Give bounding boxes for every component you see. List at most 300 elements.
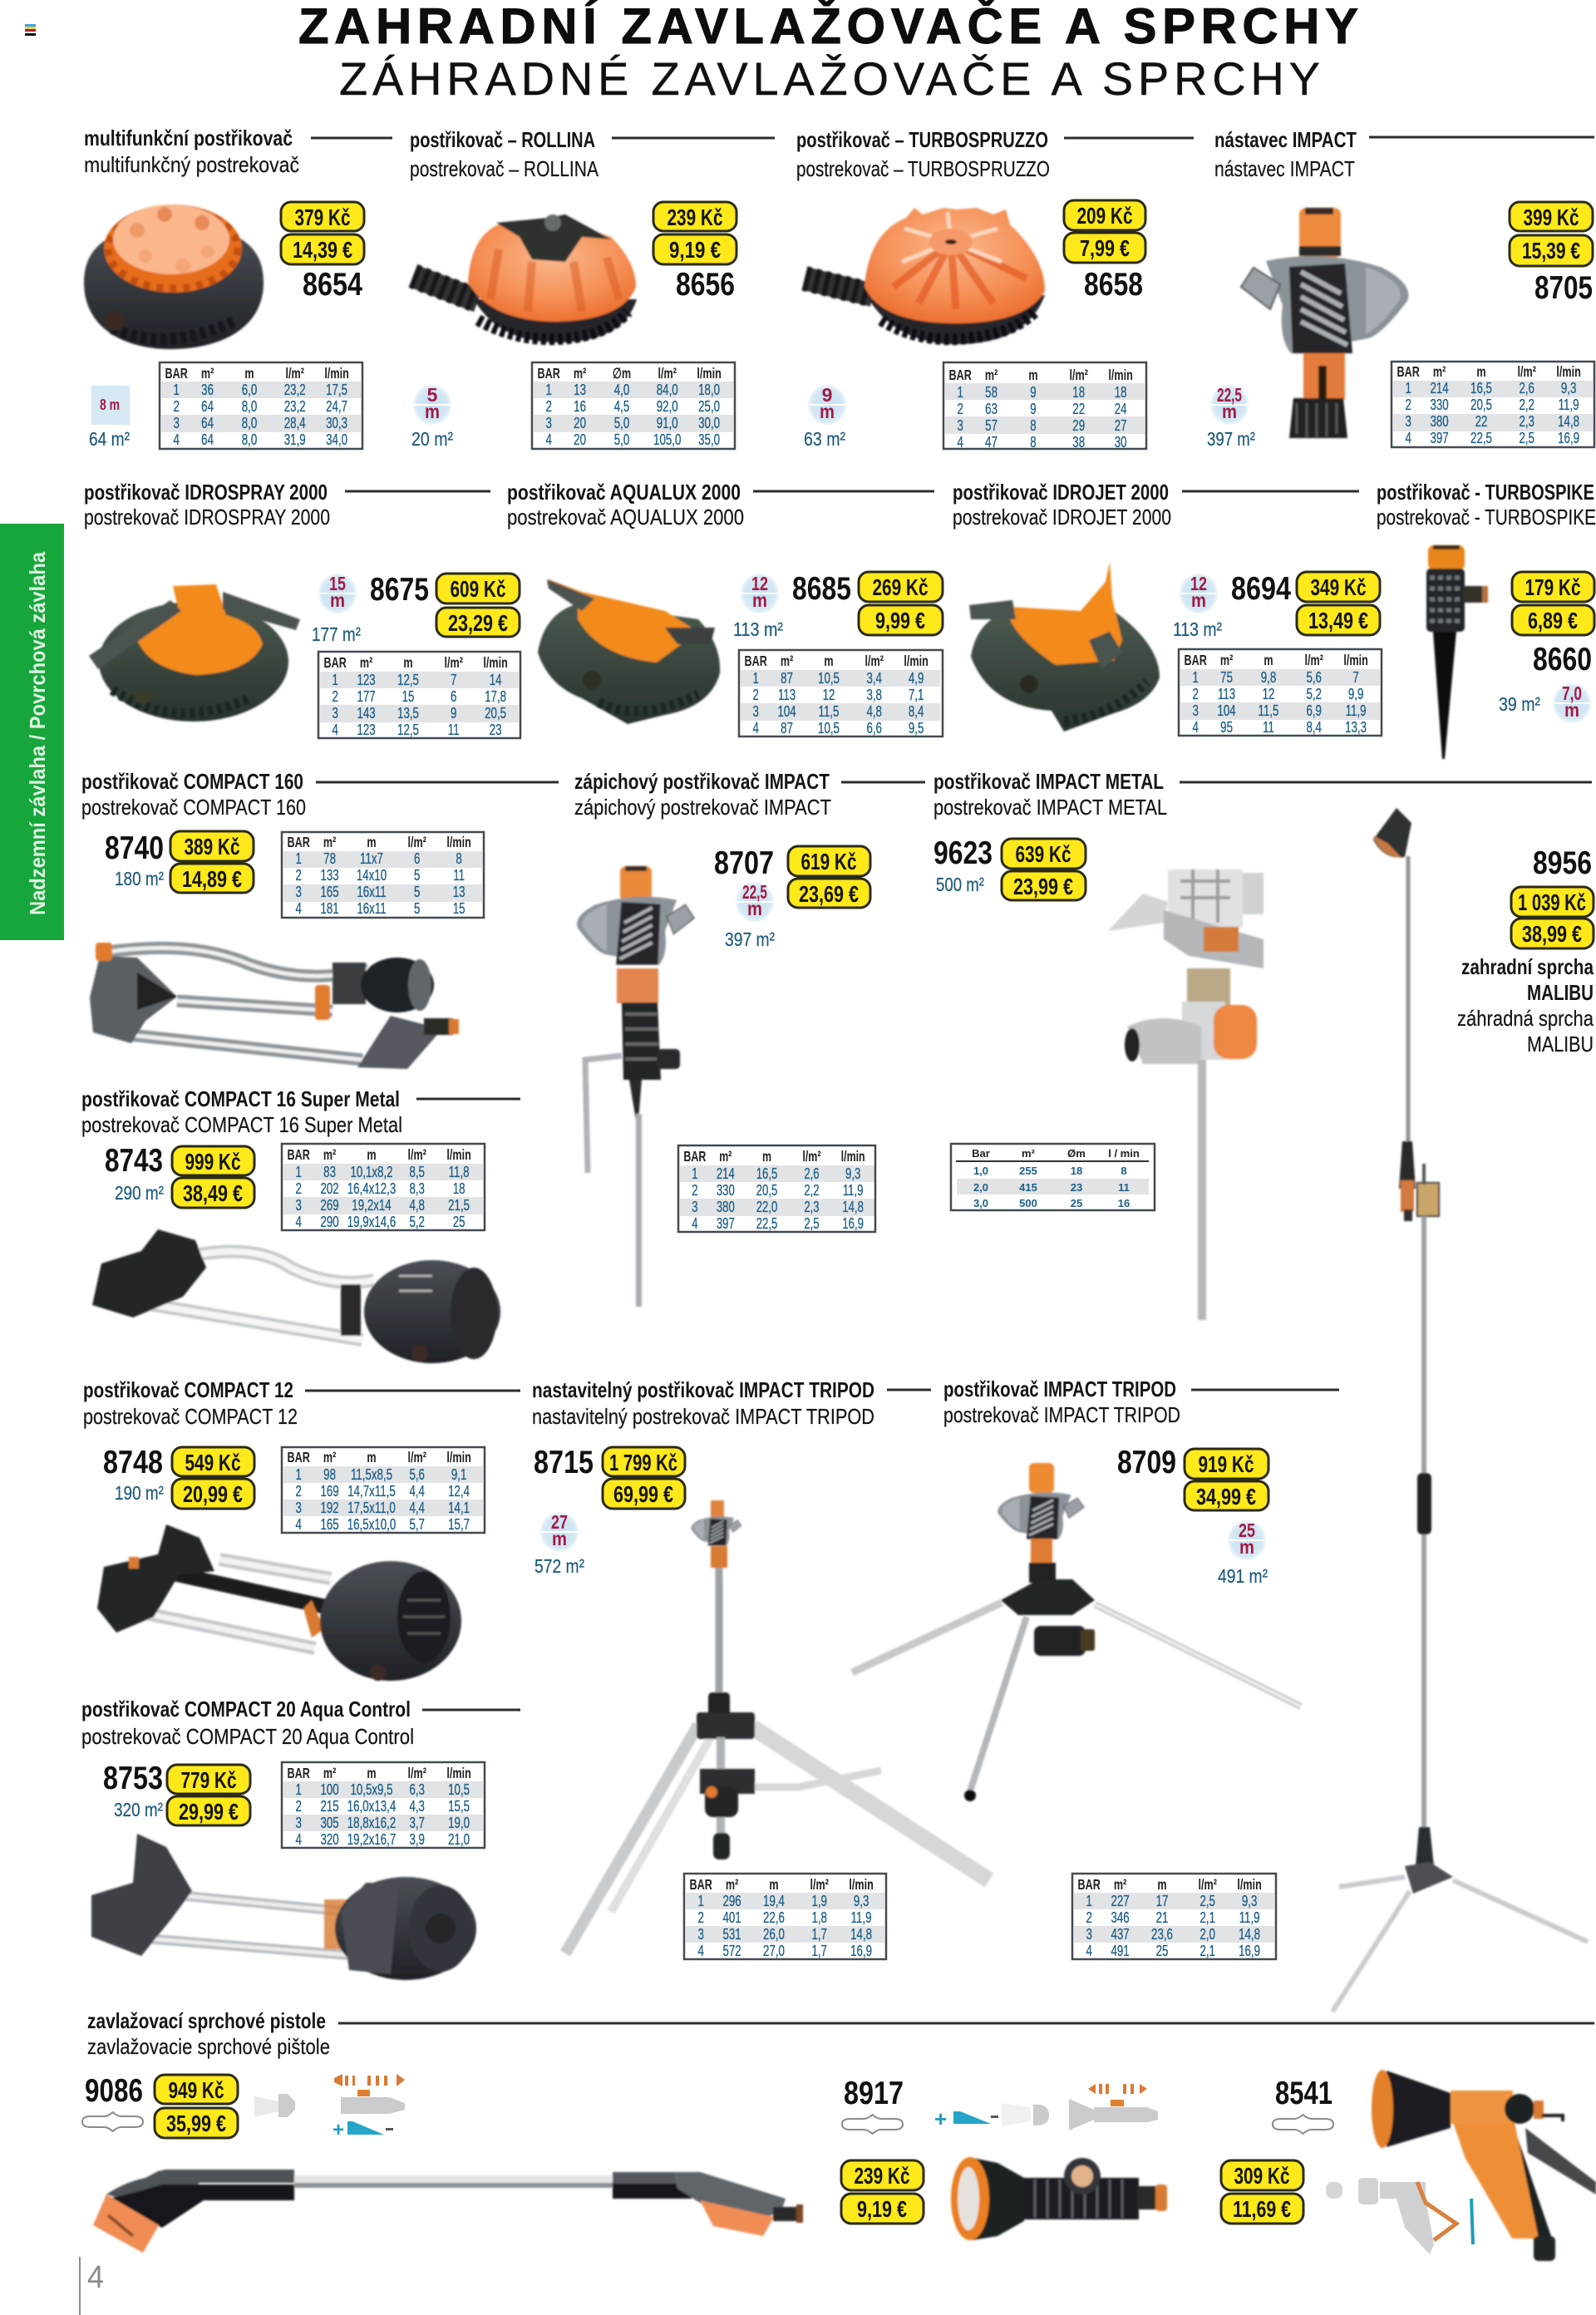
data table: 17 [1156,1893,1168,1910]
data table: 214 [717,1165,735,1183]
data table: ∅m [613,366,631,382]
data table: l/m² [802,1149,820,1165]
data table: 4 [332,722,338,739]
product image: shower nozzle [951,2157,1167,2240]
data table: 8,0 [242,415,257,432]
price badges [155,2075,238,2138]
icon: spray and regulator: + [332,2119,344,2141]
product image: impact head [1241,208,1408,438]
data table: 18,0 [698,382,720,399]
data table: 64 [201,398,214,416]
title: ZAHRADNÍ ZAVLAŽOVAČE A SPRCHY [298,0,1358,54]
data table: m² [323,835,336,851]
data table: 4 [173,431,180,449]
coverage: 9 m, 63 m² [804,384,846,450]
data table: 5,2 [409,1214,425,1231]
price badges [167,1765,250,1825]
data table: 95 [1220,719,1233,736]
price badges [1185,1449,1268,1510]
data table: 1 [295,1164,302,1181]
heading [532,1377,931,1429]
data table: 22 [1072,401,1085,418]
data table: 4 [1405,430,1411,447]
data table: 269 [320,1197,339,1214]
data table: 3,9 [409,1831,425,1849]
coverage: 25 m, 491 m² [1218,1520,1268,1587]
panel: 8956 zahradní sprcha MALIBU [1332,808,1594,2012]
coverage: 190 m²: 190 m² [115,1482,164,1504]
data table: 8,3 [409,1180,425,1198]
article number: 8715 [534,1445,594,1480]
price badges: 949 Kč [168,2077,224,2103]
product image: metal impact sprinkler [1108,869,1264,1320]
data table: 21,0 [448,1831,470,1849]
data table: 25 [1071,1197,1082,1209]
panel: 8743 postřikovač COMPACT 16 Super Metal [81,1086,520,1363]
price badges: 379 Kč [294,204,351,230]
coverage: 12 m, 113 m²: 12 [1190,573,1207,594]
heading: nastavitelný postřikovač IMPACT TRIPOD [532,1377,874,1402]
data table: 5 [414,884,420,901]
product image: oscillating sprinkler 16 [92,1229,500,1363]
data table: l/min [697,366,722,382]
data table: l/m² [408,835,426,851]
data table: 4 [295,1214,302,1231]
product image: spike impact sprinkler [577,866,694,1307]
data table: 380 [717,1199,735,1216]
heading: postrekovač COMPACT 20 Aqua Control [81,1724,414,1749]
price badges [841,2160,924,2224]
panel: 8709 postřikovač IMPACT TRIPOD [852,1377,1339,1960]
data table: 19,4 [763,1893,785,1910]
heading [83,1377,520,1429]
data table: 531 [722,1926,741,1943]
data table: 2 [545,398,552,416]
data table: 23 [490,722,502,739]
article number: 8675 [370,572,429,608]
data table: 3,4 [866,670,882,687]
data table: 9 [451,705,456,722]
data table: 22,5 [1470,430,1492,447]
coverage: 180 m²: 180 m² [115,868,164,889]
price badges: 1 799 Kč [609,1450,677,1475]
data table: 3 [697,1926,704,1943]
coverage: 22,5 m, 397 m²: 22,5 [742,881,767,903]
data table: BAR [324,655,347,672]
data table: 3 [295,1815,302,1832]
data table: 2 [295,1180,302,1198]
coverage: 22,5 m, 397 m²: m [1222,401,1237,422]
data table: 104 [1217,702,1236,720]
coverage: 8 m, 64 m²: 8 m [100,397,120,413]
product image: turbospike [1426,545,1488,759]
data table: 2,1 [1199,1943,1215,1960]
data table: 6 [451,688,456,706]
price badges: 13,49 € [1308,608,1368,633]
panel: 8658 postřikovač TURBOSPRUZZO [796,127,1194,451]
data table: 9,3 [1561,380,1576,397]
data table: 14,8 [842,1199,864,1216]
data table: 11,8 [449,1164,470,1181]
data table: m² [985,367,998,384]
data table: 572 [722,1943,741,1960]
data table: 3 [545,415,552,432]
data table: l/min [446,835,471,851]
data table: 64 [201,415,214,432]
heading: multifunkčný postrekovač [84,152,299,177]
coverage: 15 m, 177 m² [312,573,361,645]
data table: 4,8 [409,1197,425,1214]
data table: 1 [957,384,963,401]
heading: postřikovač IMPACT TRIPOD [943,1377,1176,1401]
panel: 8694 postřikovač IDROJET 2000 [953,480,1382,736]
price badges [1297,572,1380,635]
data table: m [367,1147,377,1164]
data table: 3 [957,417,963,435]
data table: m² [1433,364,1446,381]
data table: 5,0 [614,431,629,449]
data table: 15,5 [448,1798,470,1815]
data table: 2,2 [1519,397,1534,414]
data table: 64 [201,431,214,449]
heading [87,2008,1594,2059]
heading: postřikovač COMPACT 12 [83,1377,293,1402]
data table: 1 [173,382,180,399]
data table: 123 [357,722,376,739]
data table: 21 [1156,1909,1168,1927]
data table: 6,3 [409,1781,425,1799]
coverage: 5 m, 20 m²: m [425,401,440,422]
data table: m [403,655,413,672]
data table: 4,9 [909,670,924,687]
printer colour marks [25,24,36,36]
data table: 1 [295,1781,302,1799]
data table: l/min [849,1877,874,1894]
coverage: 15 m, 177 m²: 177 m² [312,623,361,645]
data table: 25 [453,1214,466,1231]
data table: 16,5x10,0 [347,1516,396,1534]
data table: 13,3 [1345,719,1367,736]
data table: m [762,1149,771,1165]
coverage: 39 m², 7,0 m: m [1564,699,1579,721]
data table: l/min [1556,364,1581,381]
data table: 11x7 [360,850,383,868]
coverage: 500 m²: 500 m² [936,874,984,895]
coverage: 5 m, 20 m²: 20 m² [411,428,453,450]
coverage: 27 m, 572 m²: 27 [551,1511,568,1533]
article number: 8709 [1117,1445,1176,1480]
data table: l/m² [1070,367,1088,384]
data table: 2 [752,687,759,704]
heading: postrekovač IDROJET 2000 [953,505,1171,529]
heading: postřikovač IDROSPRAY 2000 [84,480,328,505]
data table: 3,8 [866,687,882,704]
page number: 4 [87,2260,104,2295]
heading: postřikovač – TURBOSPRUZZO [796,127,1048,152]
data table: 227 [1111,1893,1130,1910]
article number: 8685 [792,571,851,607]
data table [1072,1874,1276,1960]
price badges [603,1447,685,1509]
data table: 16 [574,398,586,416]
data table: 31,9 [284,431,306,449]
data table: BAR [1078,1877,1101,1894]
heading [81,1697,520,1749]
price badges: 35,99 € [166,2111,226,2136]
data table: m² [781,653,793,670]
coverage: 39 m², 7,0 m [1499,682,1591,723]
data table: BAR [1397,364,1420,381]
data table: 202 [320,1180,339,1198]
data table: 24 [1115,401,1127,418]
data table: m [1476,364,1486,381]
data table: 9,3 [845,1165,860,1183]
heading [943,1377,1339,1427]
data table: 1,9 [811,1893,827,1910]
article number: 8707 [714,845,774,881]
data table: 22,0 [756,1199,777,1216]
data table: 3 [332,705,338,722]
data table: 4 [295,1831,302,1849]
price badges [172,1146,254,1208]
data table: 4 [1086,1943,1092,1960]
coverage: 27 m, 572 m² [534,1511,584,1577]
data table: 11,9 [1346,702,1367,720]
data table: 1 [295,1466,302,1484]
data table: 2,3 [1519,413,1534,431]
data table: 330 [1430,397,1449,414]
data table: Øm [1067,1147,1086,1160]
coverage: 12 m, 113 m²: 113 m² [733,618,783,640]
data table: 1 [1086,1893,1092,1910]
data table: 11,9 [1559,397,1579,414]
data table: 16,9 [850,1943,872,1960]
coverage: 12 m, 113 m²: 113 m² [1173,618,1222,640]
data table: 415 [1019,1181,1037,1194]
data table: 8 [456,850,462,868]
data table: 14,7x11,5 [347,1483,396,1500]
data table: 3 [295,1500,302,1517]
data table: l/m² [658,366,677,382]
product image: rollina sprinkler [413,214,637,342]
heading: zavlažovacie sprchové pištole [87,2034,330,2059]
data table [532,362,735,449]
data table: m² [726,1877,738,1894]
price badges: 7,99 € [1080,235,1130,261]
data table: 13 [453,884,466,901]
price badges: 779 Kč [181,1767,236,1793]
data table: 17,5 [326,382,347,399]
data table: 397 [1430,430,1449,447]
data table: Bar [972,1147,990,1160]
data table: 3 [295,884,302,901]
data table: 22 [1475,413,1487,431]
heading: postrekovač IDROSPRAY 2000 [84,505,330,529]
data table: 16,5 [756,1165,777,1183]
data table: 296 [722,1893,741,1910]
data table: 2,6 [1519,380,1534,397]
data table: 9,9 [1348,686,1363,703]
article number: 8917 [844,2076,904,2111]
data table: 290 [320,1214,339,1231]
data table: 3 [1192,702,1199,720]
data table: 16x11 [357,884,387,901]
data table: 4,4 [409,1483,425,1500]
data table: 87 [781,670,793,687]
icon: coupling outline [82,2112,143,2131]
product 8541 [1221,2070,1596,2261]
icon: regulator and spray [934,2084,1158,2131]
heading [1377,480,1596,529]
data table: l/m² [1305,653,1323,669]
panel: 8707 zápichový postřikovač IMPACT [574,769,925,1307]
price badges: 999 Kč [185,1149,241,1175]
data table: m [1264,653,1273,669]
heading: zápichový postřikovač IMPACT [574,769,830,794]
side tab: category label [0,524,64,940]
product image: watering wand [93,2170,803,2253]
data table: 214 [1430,380,1449,397]
data table: 9,3 [854,1893,869,1910]
price badges: 389 Kč [185,834,239,860]
heading: postrekovač – ROLLINA [410,156,599,181]
product image: low tripod sprinkler [852,1463,1301,1801]
data table: m² [201,366,214,382]
icon: spray and regulator [254,2074,405,2141]
data table: 20 [574,431,586,449]
coverage: 22,5 m, 397 m² [1207,384,1255,450]
coverage: 9 m, 63 m²: m [820,401,835,422]
price badges: 619 Kč [801,849,856,874]
heading: postrekovač IMPACT METAL [933,795,1167,820]
heading: zavlažovací sprchové pistole [87,2008,326,2033]
data table: 8,0 [242,398,257,416]
price badges: 34,99 € [1196,1484,1256,1510]
price badges: 349 Kč [1310,574,1367,600]
price badges: 9,99 € [875,608,925,633]
coverage: 22,5 m, 397 m²: 397 m² [1207,428,1255,450]
data table: 12,4 [448,1483,470,1500]
data table: 3 [1405,413,1411,431]
data table [282,1447,485,1534]
data table: 5,6 [1306,669,1322,687]
article number: 8654 [303,267,362,303]
data table: l/min [446,1766,471,1782]
data table: 4,0 [614,382,629,399]
data table: 8 [1030,434,1037,451]
data table: BAR [949,367,972,384]
data table: 23,2 [284,382,306,399]
data table: 29 [1072,417,1085,435]
panel: 8753 postřikovač COMPACT 20 Aqua Control [81,1697,520,1980]
data table: 3 [692,1199,698,1216]
data table [678,1145,875,1233]
data table: 24,7 [326,398,347,416]
price badges: 11,69 € [1233,2196,1291,2222]
data table: l/m² [408,1766,426,1782]
data table: 8,4 [909,703,924,721]
data table: 18 [1072,384,1085,401]
data table: 2,6 [804,1165,820,1183]
heading: postrekovač COMPACT 160 [81,795,306,820]
data table: 2 [692,1182,698,1199]
data table: 113 [778,687,796,704]
data table: 2 [697,1909,704,1927]
data table: 4 [295,1516,302,1534]
data table: 87 [781,720,793,737]
article number: 8748 [103,1445,163,1480]
coverage: 25 m, 491 m²: 491 m² [1218,1565,1268,1587]
data table: 28,4 [284,415,306,432]
data table: 10,5 [818,670,840,687]
coverage: 27 m, 572 m²: 572 m² [534,1555,584,1577]
data table: l/m² [408,1147,426,1164]
coverage: 12 m, 113 m²: m [1191,589,1206,611]
data table: 1 [692,1165,698,1183]
heading: postřikovač IDROJET 2000 [953,480,1169,505]
data table: 27,0 [763,1943,785,1960]
heading [81,769,559,820]
data table: 22,6 [763,1909,785,1927]
data table: 346 [1111,1909,1130,1927]
data table: 2 [957,401,963,418]
price badges [859,572,943,635]
data table: 35,0 [698,431,720,449]
product image: idrospray sprinkler [89,584,300,722]
data table: 2 [295,1483,302,1500]
product image: oscillating sprinkler 12 [97,1524,461,1681]
price badges: 639 Kč [1016,841,1071,867]
data table: 22,5 [756,1215,777,1233]
price badges: 23,99 € [1013,874,1073,899]
price badges: 209 Kč [1077,203,1132,229]
data table [943,362,1146,451]
data table: 4,5 [614,398,629,416]
heading [953,480,1359,529]
data table: 5,6 [409,1466,425,1484]
data table: l / min [1108,1147,1140,1160]
data table: 11 [448,722,460,739]
data table: 11 [453,867,465,884]
data table: BAR [538,366,560,382]
title: ZÁHRADNÉ ZAVLAŽOVAČE A SPRCHY [339,52,1320,105]
data table: 11 [1118,1181,1130,1194]
data table: 2,5 [804,1215,820,1233]
data table: m [1028,367,1038,384]
data table: 1,8 [811,1909,827,1927]
data table: 305 [320,1815,339,1832]
data table: 14,1 [448,1500,470,1517]
price badges [172,1447,254,1509]
data table: 1 [697,1893,704,1910]
data table [951,1144,1155,1210]
heading: postřikovač IMPACT METAL [933,769,1164,794]
coverage: 15 m, 177 m²: 15 [329,573,346,594]
data table: 1 [752,670,759,687]
data table: 1 [1192,669,1199,687]
data table: l/min [1108,367,1133,384]
data table: 13,5 [397,705,419,722]
data table: 9 [1030,401,1037,418]
data table: 11,9 [1239,1909,1260,1927]
page number [80,2257,104,2315]
data table: l/m² [810,1877,829,1894]
data table: m [769,1877,779,1894]
data table: m [824,653,834,670]
heading: postřikovač – ROLLINA [410,127,595,152]
data table: 181 [320,900,339,918]
icon: coupling outline [842,2115,903,2134]
